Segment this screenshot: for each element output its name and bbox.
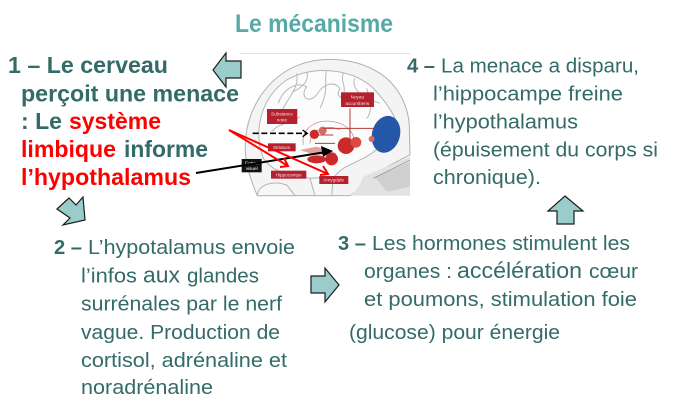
text block: step 4: chronique). (433, 166, 541, 189)
text block: step 4: (épuisement du corps si (433, 138, 658, 162)
text block: step 2: noradrénaline (81, 376, 213, 399)
red labels: Hippocampe (276, 172, 302, 177)
text block: step 2: 2 – (54, 236, 82, 259)
text block: step 2 (54, 236, 295, 399)
red labels: Striatum (273, 145, 290, 150)
red labels: noire (277, 118, 288, 123)
brain outline (259, 71, 397, 178)
red labels (242, 92, 374, 184)
text block: step 1: : Le (21, 108, 62, 134)
text block: step 3: et poumons, stimulation foie (364, 288, 637, 311)
text block: step 1: l’hypothalamus (21, 164, 191, 190)
text block: step 4: 4 – (407, 54, 435, 78)
text block: step 2: aux (143, 262, 180, 288)
text block: step 1: perçoit une menace (21, 80, 239, 106)
text block: step 2: l’infos (81, 264, 137, 288)
arrow: up, step 3 to 4 (548, 196, 583, 224)
text block: step 2: surrénales par le nerf (81, 292, 282, 316)
blue prefrontal region (368, 113, 404, 156)
dashed arrow (253, 131, 306, 136)
text block: step 2: glandes (187, 264, 259, 288)
text block: step 4 (407, 54, 658, 189)
text block: step 1: limbique (21, 136, 116, 162)
text block: step 3: accélération (457, 258, 582, 283)
text block: step 4: La menace a disparu, (441, 54, 639, 78)
text block: step 1: informe (124, 136, 208, 162)
text block: step 3: (glucose) pour énergie (349, 321, 560, 344)
cortex folds (272, 70, 380, 132)
grey neck and jaw (350, 157, 410, 196)
arrow: right, step 2 to 3 (311, 268, 339, 302)
text block: step 3: cœur (589, 260, 638, 283)
red labels: accumbens (345, 101, 370, 106)
red labels: Amygdale (323, 178, 344, 183)
arrow: black pointer from hypothalamus (196, 146, 333, 173)
text block: step 1 (8, 52, 239, 190)
red labels: Cortex (245, 160, 259, 165)
text block: step 2: cortisol, adrénaline et (81, 349, 287, 372)
text block: step 3: organes : (364, 260, 452, 283)
red labels: Noyau (351, 95, 364, 100)
red labels: visuel (246, 166, 258, 171)
red nuclei (307, 127, 375, 165)
text block: step 1: 1 – Le cerveau (8, 52, 168, 78)
text block: step 3: 3 – (338, 232, 366, 255)
brain illustration (240, 53, 410, 196)
limbic circuit rings (303, 121, 354, 152)
text block: step 2: vague. Production de (81, 321, 280, 344)
text block: step 3: Les hormones stimulent les (372, 232, 630, 255)
red labels: Substance (271, 111, 293, 116)
text block: step 2: L’hypotalamus envoie (88, 236, 295, 259)
text block: step 4: l’hypothalamus (433, 110, 578, 134)
arrow: left, step 1 (213, 53, 241, 87)
text block: step 3 (338, 232, 638, 344)
text block: step 4: l’hippocampe freine (433, 82, 623, 106)
arrow: red pointers to hippocampus and amygdala (229, 130, 328, 175)
arrow: down-right, step 1 to 2 (57, 197, 85, 225)
title: Le mécanisme (235, 10, 393, 38)
head silhouette (245, 59, 410, 196)
text block: step 1: système (69, 108, 161, 134)
cerebellum and brain stem (257, 177, 333, 196)
